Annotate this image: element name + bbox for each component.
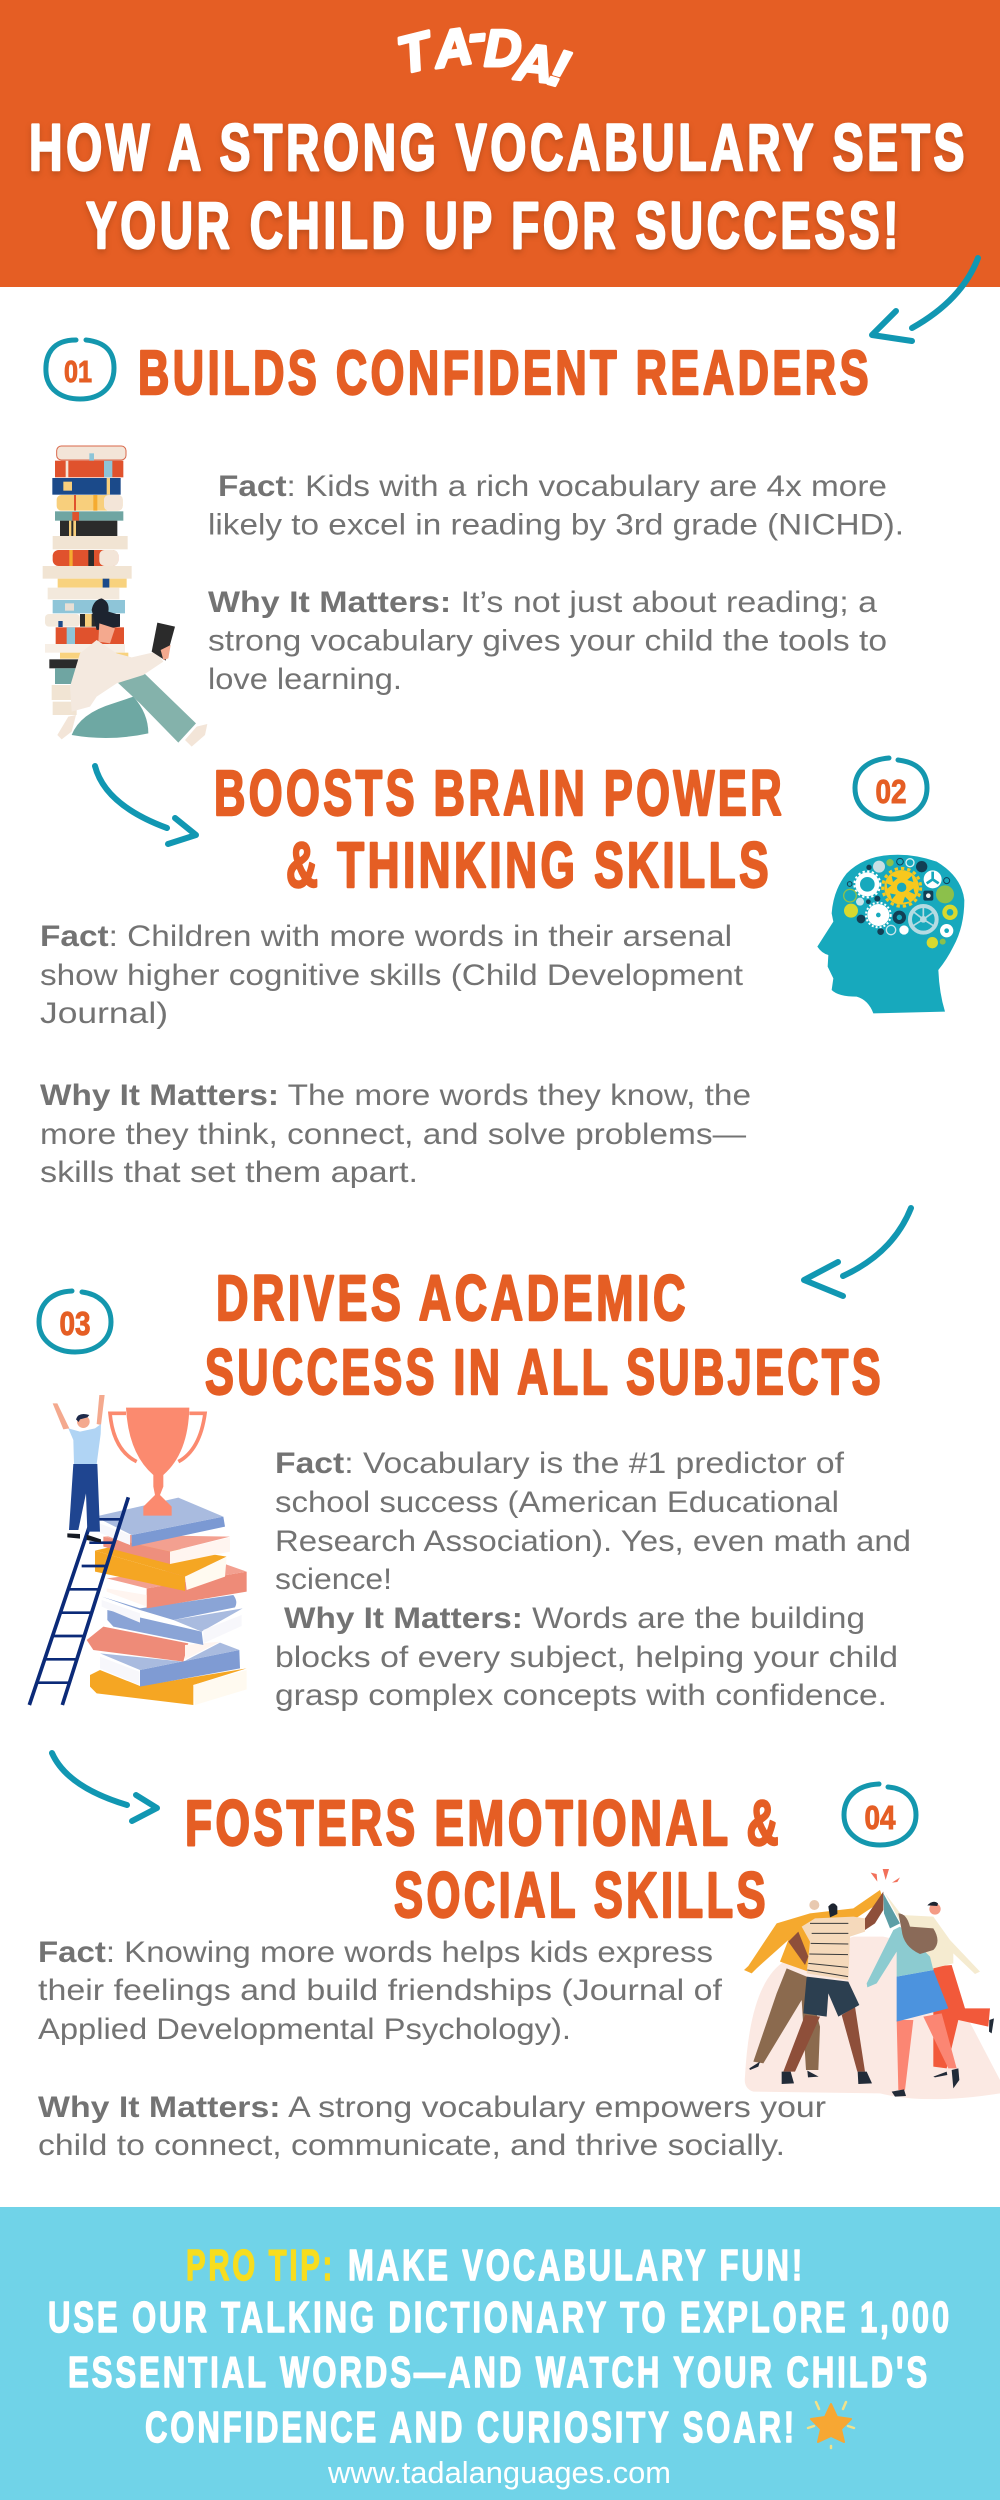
text: section 4 <box>38 1936 826 2162</box>
text: section 3: school success (American Educational <box>275 1486 839 1519</box>
text: section 3: science! <box>275 1563 392 1596</box>
books <box>87 1498 247 1705</box>
ladder <box>29 1497 128 1705</box>
trophy <box>110 1408 205 1516</box>
illustration: trophy on books with ladder <box>29 1395 247 1705</box>
arrow: section 2 to section 3 <box>804 1208 911 1296</box>
arrow: header to section 1 <box>872 258 978 341</box>
person: cream jacket and red trousers <box>885 1893 994 2077</box>
text: section 1: Why It Matters: It’s not just about reading; a <box>208 586 877 619</box>
icon: star <box>808 2402 854 2448</box>
text: section 4: Fact: Knowing more words helps kids express <box>38 1936 713 1969</box>
gears <box>844 858 958 948</box>
text: section 2: more they think, connect, and solve problems— <box>40 1118 746 1151</box>
badge 04: 04 <box>864 1799 896 1836</box>
pro tip text: PRO TIP: <box>186 2241 335 2290</box>
text: section 1: love learning. <box>208 663 402 696</box>
text: section 1: Fact: Kids with a rich vocabulary are 4x more <box>218 470 887 503</box>
spark <box>871 1869 900 1883</box>
heading: section 4 <box>185 1787 782 1931</box>
text: section 1: strong vocabulary gives your child the tools to <box>208 624 887 658</box>
text: section 3: Why It Matters: Words are the building <box>284 1602 865 1635</box>
pro tip text <box>48 2241 952 2452</box>
illustration: friends giving a high five <box>744 1869 1000 2099</box>
woman <box>57 598 207 747</box>
text: section 2 <box>40 920 751 1189</box>
header banner <box>0 0 1000 287</box>
text: section 4: Applied Developmental Psychology). <box>38 2013 571 2046</box>
text: section 1: likely to excel in reading by 3rd grade (NICHD). <box>208 508 904 542</box>
text: section 3: grasp complex concepts with confidence. <box>275 1679 887 1712</box>
text: section 4: Why It Matters: A strong vocabulary empowers your <box>38 2091 826 2124</box>
pro tip text: MAKE VOCABULARY FUN! <box>348 2241 805 2290</box>
footer panel: pro tip <box>0 2207 1000 2500</box>
heading: section 2 <box>214 757 785 901</box>
text: section 3 <box>275 1447 911 1712</box>
heading: section 4: SOCIAL SKILLS <box>394 1859 769 1931</box>
text: section 3: Fact : Vocabulary is the #1 predictor of <box>275 1447 845 1480</box>
man <box>53 1395 105 1543</box>
text: section 2: show higher cognitive skills (Child Development <box>40 959 744 992</box>
badge 02: 02 <box>876 773 906 810</box>
badge 02 <box>855 758 927 819</box>
illustration: woman reading with book stack <box>43 446 207 747</box>
text: section 3: blocks of every subject, helping your child <box>275 1641 898 1674</box>
heading: section 3 <box>205 1262 884 1408</box>
book stack <box>43 446 132 715</box>
badge 04 <box>844 1784 916 1845</box>
text: section 3: Research Association). Yes, even math and <box>275 1525 911 1558</box>
badge 01: 01 <box>64 354 92 389</box>
person: striped top and dark shorts <box>782 1892 883 2084</box>
logo: TA-DA!: TA-DA! <box>392 5 575 99</box>
heading: section 2: & THINKING SKILLS <box>286 829 772 901</box>
person: yellow sweater and brown trousers <box>744 1890 883 2077</box>
badge 03 <box>39 1291 111 1352</box>
title <box>29 110 968 262</box>
arrow: section 1 to section 2 <box>95 766 196 844</box>
person: blue skirt and long hair <box>867 1893 959 2097</box>
text: section 2: skills that set them apart. <box>40 1156 418 1189</box>
heading: section 3: DRIVES ACADEMIC <box>216 1262 689 1334</box>
text: section 2: Journal) <box>40 997 168 1030</box>
icon: head with gears <box>817 855 964 1013</box>
text: section 4: child to connect, communicate, and thrive socially. <box>38 2129 785 2162</box>
arrow: section 3 to section 4 <box>52 1753 157 1821</box>
badge 01 <box>46 340 114 399</box>
badge 03: 03 <box>60 1305 90 1342</box>
text: section 4: their feelings and build friendships (Journal of <box>38 1974 723 2007</box>
text: section 1 <box>208 470 904 696</box>
text: section 2: Fact: Children with more words in their arsenal <box>40 920 732 953</box>
text: section 2: Why It Matters: The more words they know, the <box>40 1079 751 1112</box>
website url: www.tadalanguages.com <box>327 2455 671 2490</box>
